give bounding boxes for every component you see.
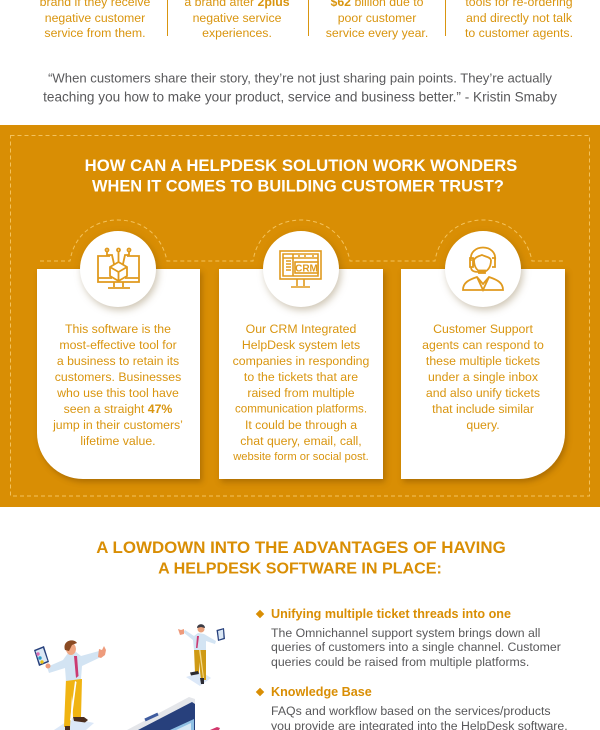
- card 3: these multiple tickets: [426, 354, 540, 368]
- advantage 1: queries could be raised from multiple platforms.: [271, 655, 529, 669]
- icon: CRM monitor: [260, 231, 346, 314]
- stat 3 text: poor customer: [338, 11, 416, 25]
- advantage 1: [256, 607, 561, 669]
- card 1: most-effective tool for: [59, 338, 177, 352]
- card 1: seen a straight 47%: [64, 402, 172, 416]
- icon: diamond bullet: [256, 610, 264, 618]
- illustration: people and monitor: [34, 624, 225, 730]
- quote: teaching you how to make your product, service and business better.” - Kristin Smaby: [43, 90, 557, 104]
- card 2: chat query, email, call,: [240, 434, 362, 448]
- card 2: HelpDesk system lets: [242, 338, 360, 352]
- card 1: jump in their customers’: [53, 418, 183, 432]
- card 3: under a single inbox: [428, 370, 538, 384]
- stat 4 text: to customer agents.: [465, 26, 573, 40]
- stat 2 text: negative service: [193, 11, 281, 25]
- advantage 2: Knowledge Base: [271, 685, 372, 699]
- advantage 1: queries of customers into a single channel. Customer: [271, 640, 561, 654]
- card 3: Customer Support: [433, 322, 533, 336]
- card 2: Our CRM Integrated: [246, 322, 356, 336]
- card 1: customers. Businesses: [55, 370, 181, 384]
- card 2: raised from multiple: [247, 386, 355, 400]
- stat 2 text: [184, 0, 290, 40]
- panel: statistics row: [40, 0, 573, 40]
- card 2: It could be through a: [245, 418, 357, 432]
- stat 1 text: service from them.: [44, 26, 146, 40]
- stat 3 text: [326, 0, 428, 40]
- panel: helpdesk solution band: [0, 125, 600, 507]
- stat 3 text: service every year.: [326, 26, 428, 40]
- card 2: companies in responding: [233, 354, 369, 368]
- card 1: [37, 269, 200, 479]
- left figure: [34, 640, 106, 730]
- advantage 1: The Omnichannel support system brings down all: [271, 626, 540, 640]
- card 3: and also unify tickets: [426, 386, 540, 400]
- card 3: [401, 269, 565, 479]
- icon: CRM monitor: CRM: [295, 264, 318, 274]
- card 1: a business to retain its: [57, 354, 179, 368]
- icon: support agent: [442, 231, 528, 314]
- stat 2 text: experiences.: [202, 26, 272, 40]
- quote: [43, 70, 557, 104]
- stat 1 text: negative customer: [45, 11, 145, 25]
- card 2: communication platforms.: [235, 402, 367, 416]
- band heading: WHEN IT COMES TO BUILDING CUSTOMER TRUST?: [92, 178, 504, 196]
- icon: monitor with cube: [78, 231, 162, 314]
- card 1: lifetime value.: [80, 434, 156, 448]
- card 1: This software is the: [65, 322, 171, 336]
- section heading: advantages: [96, 538, 506, 578]
- section heading: advantages: A HELPDESK SOFTWARE IN PLACE:: [158, 560, 442, 578]
- section heading: advantages: A LOWDOWN INTO THE ADVANTAGES OF HAVING: [96, 538, 506, 557]
- card 3: query.: [466, 418, 500, 432]
- stat 4 text: [465, 0, 573, 40]
- card 2: to the tickets that are: [244, 370, 358, 384]
- stat 4 text: and directly not talk: [466, 11, 572, 25]
- right figure: [178, 624, 225, 686]
- stat 1 text: [40, 0, 150, 40]
- advantage 2: FAQs and workflow based on the services/products: [271, 704, 551, 718]
- card 2: [219, 269, 383, 479]
- card 3: agents can respond to: [422, 338, 544, 352]
- band heading: HOW CAN A HELPDESK SOLUTION WORK WONDERS: [85, 156, 517, 175]
- card 1: who use this tool have: [57, 386, 179, 400]
- icon: diamond bullet: [256, 688, 264, 696]
- advantage 1: Unifying multiple ticket threads into one: [271, 607, 511, 621]
- card 2: website form or social post.: [233, 451, 369, 463]
- band heading: [85, 156, 517, 196]
- quote: “When customers share their story, they’re not just sharing pain points. They’re actually: [48, 70, 552, 86]
- advantage 2: [256, 685, 568, 730]
- monitor: [127, 697, 220, 730]
- card 3: that include similar: [432, 402, 534, 416]
